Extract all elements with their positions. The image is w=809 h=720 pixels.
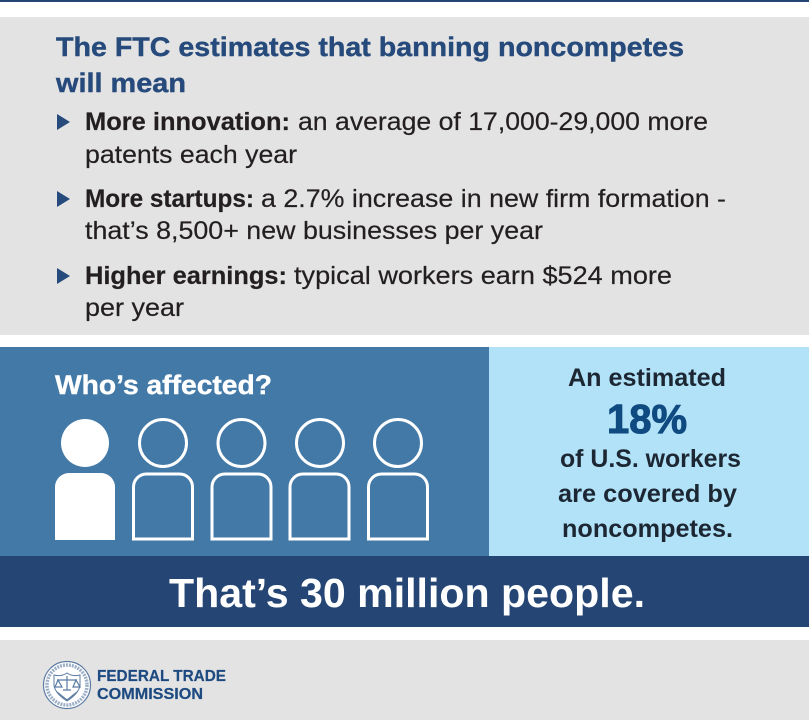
panel: 18 percent statistic: are covered by (558, 480, 737, 508)
bullet: more innovation: More innovation: (85, 108, 290, 136)
logotype (97, 668, 226, 703)
bullet: more startups: a 2.7% increase in new firm formation - (261, 185, 726, 213)
bullet: higher earnings (57, 262, 672, 322)
icons: outlined people (134, 420, 428, 539)
panel: 18 percent statistic: of U.S. workers (560, 445, 741, 473)
bullet: more innovation (57, 108, 708, 169)
logotype: FEDERAL TRADE (97, 668, 226, 685)
bullet: more startups (57, 185, 726, 245)
icon: FTC seal (44, 662, 90, 708)
bullet: more startups: More startups: (85, 185, 254, 213)
heading: FTC estimates (55, 32, 684, 98)
big number: 18%: 18% (607, 396, 687, 442)
panel: FTC estimates (0, 17, 809, 335)
bullet: higher earnings: typical workers earn $524 more (294, 262, 672, 290)
panel: 18 percent statistic: noncompetes. (562, 515, 733, 543)
panel: 18 percent statistic: An estimated (568, 364, 726, 392)
bullet: higher earnings: Higher earnings: (85, 262, 287, 290)
heading: FTC estimates: will mean (55, 68, 186, 98)
panel: who's affected (0, 347, 489, 556)
footer (0, 640, 809, 720)
heading: FTC estimates: The FTC estimates that banning noncompetes (56, 32, 684, 62)
bullet: more startups: that’s 8,500+ new businesses per year (85, 217, 543, 245)
logotype: COMMISSION (97, 686, 203, 703)
banner: 30 million people (0, 556, 809, 627)
panel: 18 percent statistic (489, 347, 809, 556)
bullet: higher earnings: per year (85, 294, 184, 322)
bullet: more innovation: patents each year (85, 141, 297, 169)
banner: 30 million people: That’s 30 million people. (169, 570, 645, 616)
icon: filled person (55, 419, 115, 540)
heading: who's affected: Who’s affected? (55, 370, 272, 400)
bullet: more innovation: an average of 17,000-29,000 more (298, 108, 708, 136)
